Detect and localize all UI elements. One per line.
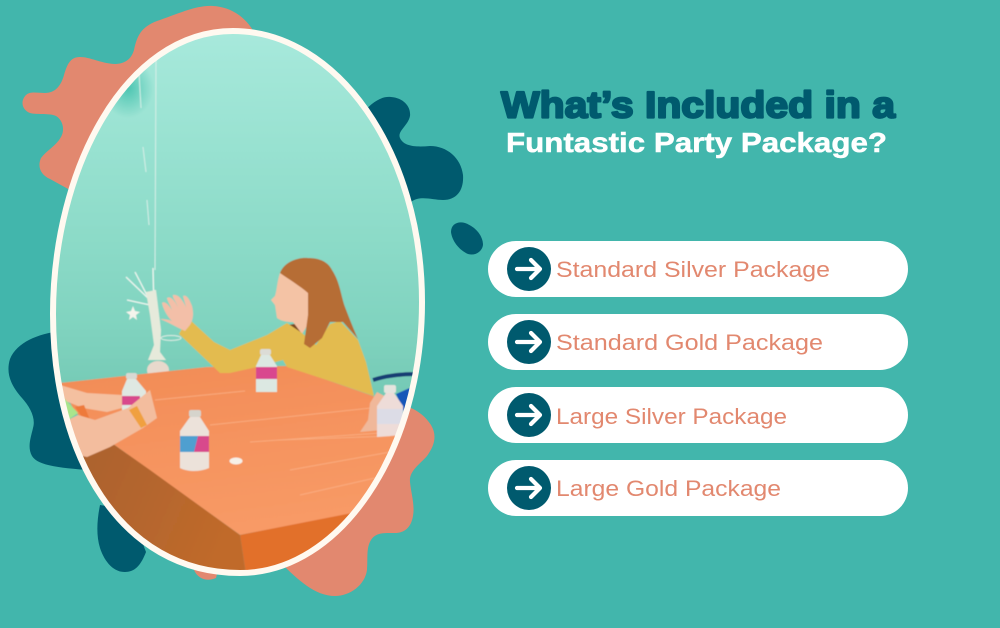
photo frame [53, 31, 422, 573]
blob: salmon lower right [280, 405, 434, 596]
blob: salmon top left [23, 6, 254, 190]
item: Large Silver Package [488, 387, 908, 443]
chair [373, 374, 416, 380]
blob: salmon small bottom [194, 570, 218, 580]
child arm upper [60, 385, 122, 412]
icon: arrow [507, 247, 551, 291]
icon: arrow [507, 393, 551, 437]
package list [488, 241, 908, 516]
girl face [271, 273, 312, 334]
blob: navy lower left [8, 330, 120, 471]
item: Large Gold Package: Large Gold Package [556, 476, 781, 501]
balloon strings [139, 60, 156, 270]
girl hair back [289, 324, 300, 332]
title line 1: What’s Included in a [501, 84, 896, 126]
item: Standard Gold Package [488, 314, 908, 370]
girl sweater [179, 318, 374, 396]
right hand [360, 392, 384, 432]
table top [60, 366, 430, 535]
bottle 2 [256, 349, 277, 392]
table wrinkles [155, 391, 400, 495]
bottle 1 [122, 373, 146, 412]
blob: navy bottom [97, 505, 146, 572]
child green sleeve [64, 398, 78, 419]
girl hand [160, 295, 193, 331]
child arm lower [68, 390, 157, 457]
bottle 3 [180, 410, 209, 471]
table centerpiece [126, 268, 181, 379]
blob: navy drop [451, 222, 483, 255]
photo: children at party table [50, 28, 430, 575]
title line 2: Funtastic Party Package? [506, 127, 887, 158]
table side left [82, 444, 246, 570]
wristband [129, 406, 147, 428]
bottle 4 [377, 385, 403, 437]
orange flap [75, 404, 89, 418]
table side right [240, 513, 352, 575]
photo wall [50, 28, 426, 428]
girl hair front [280, 258, 358, 348]
item: Standard Gold Package: Standard Gold Package [556, 330, 823, 355]
icon: arrow [507, 466, 551, 510]
icon: arrow [507, 320, 551, 364]
item: Standard Silver Package: Standard Silver Package [556, 257, 830, 282]
blob: navy top right [360, 97, 463, 210]
title [501, 84, 896, 158]
item: Standard Silver Package [488, 241, 908, 297]
item: Large Gold Package [488, 460, 908, 516]
item: Large Silver Package: Large Silver Package [556, 404, 787, 429]
bottle cap [230, 458, 242, 464]
